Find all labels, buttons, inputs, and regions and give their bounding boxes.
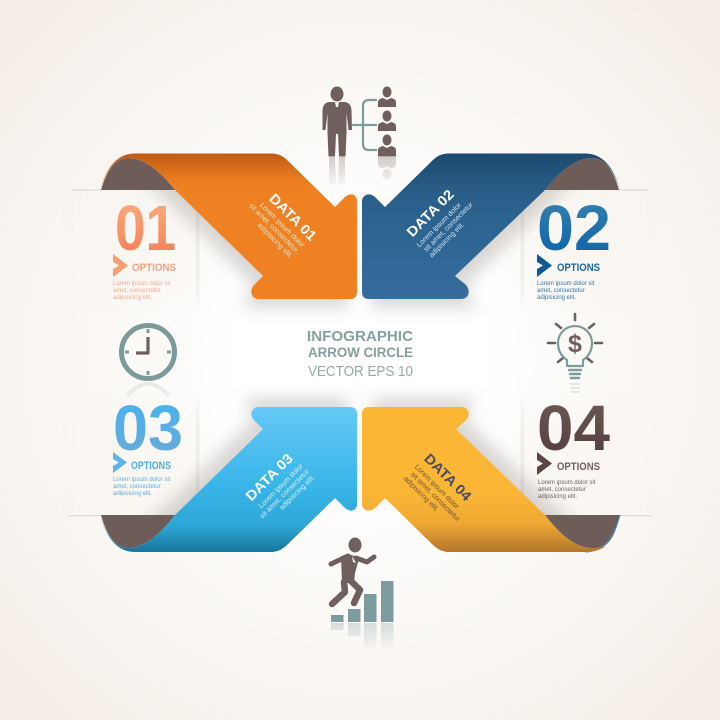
body text 01: Lorem ipsum dolor sit: [113, 281, 171, 287]
person: team member 1: [378, 86, 396, 107]
running person: [331, 538, 374, 604]
label DATA 03: DATA 03: [242, 450, 296, 504]
label DATA 04: [401, 450, 481, 529]
body text 04: adipisicing elit.: [538, 494, 577, 500]
icon: chevron 04: [537, 452, 552, 475]
label DATA 03: [239, 448, 317, 526]
label DATA 01: [242, 184, 320, 262]
body text 03: Lorem ipsum dolor sit: [113, 477, 171, 483]
heading: center title: ARROW CIRCLE: [308, 345, 413, 360]
icon: light bulb with dollar: [548, 314, 602, 392]
number 04: 04: [537, 392, 610, 464]
arrow: yellow DATA 04: [362, 398, 620, 552]
heading: center title: VECTOR EPS 10: [308, 363, 413, 380]
label DATA 03: adipisicing elit.: [277, 472, 317, 512]
label DATA 01: adipisicing elit.: [256, 221, 295, 260]
options label 02: OPTIONS: [557, 262, 600, 274]
icon: chevron 03: [113, 452, 127, 473]
label DATA 02: adipisicing elit.: [427, 220, 466, 259]
bar chart steps: [331, 581, 394, 622]
body text 02: amet, consectetur: [537, 288, 585, 294]
body text 02: Lorem ipsum dolor sit: [537, 281, 595, 287]
panel: option 04: [520, 405, 652, 516]
icon: clock: [122, 326, 174, 378]
icon: chevron 02: [537, 254, 552, 277]
heading: center title: [307, 328, 413, 380]
label DATA 04: sit amet, consectetur: [409, 470, 463, 524]
person: team member 2: [378, 110, 396, 131]
body text 04: amet, consectetur: [538, 487, 586, 493]
label DATA 01: DATA 01: [266, 190, 320, 244]
arrow: orange DATA 01: [100, 154, 357, 308]
reflection: manager and team: [329, 157, 396, 184]
label DATA 04: adipisicing elit.: [402, 474, 441, 513]
options label 01: OPTIONS: [132, 262, 176, 274]
dollar sign: $: [568, 330, 582, 358]
panel: option 01: [72, 190, 200, 300]
label DATA 02: [402, 181, 481, 260]
panel: option 02: [520, 190, 648, 300]
label DATA 01: Lorem ipsum dolor: [258, 201, 307, 249]
bars reflection: [331, 623, 394, 645]
arrow: blue DATA 02: [362, 154, 620, 308]
person: manager: [322, 86, 352, 156]
label DATA 01: sit amet, consectetur: [247, 201, 301, 255]
body text 03: adipisicing elit.: [113, 491, 152, 497]
body text 02: adipisicing elit.: [537, 295, 576, 301]
bulb reflection: [570, 384, 580, 392]
number 03: 03: [113, 392, 183, 464]
label DATA 04: Lorem ipsum dolor: [413, 462, 462, 511]
connector bracket: [353, 100, 376, 150]
icon: manager and team: [322, 86, 396, 184]
body text 03: amet, consectetur: [113, 484, 161, 490]
label DATA 03: Lorem ipsum dolor: [256, 461, 305, 510]
panel: option 03: [68, 405, 200, 516]
options label 04: OPTIONS: [557, 461, 600, 473]
icon: runner on bar chart: [331, 538, 394, 651]
label DATA 02: Lorem ipsum dolor: [415, 200, 463, 249]
options label 03: OPTIONS: [131, 460, 171, 472]
body text 01: adipisicing elit.: [113, 295, 152, 301]
person: team member 3: [378, 134, 396, 156]
label DATA 03: sit amet, consectetur: [258, 467, 311, 520]
arrow: cyan DATA 03: [100, 398, 357, 552]
label DATA 02: DATA 02: [403, 186, 457, 240]
icon: chevron 01: [113, 254, 128, 277]
heading: center title: INFOGRAPHIC: [307, 328, 413, 345]
label DATA 02: sit amet, consectetur: [421, 200, 475, 253]
clock reflection: [127, 384, 169, 396]
body text 01: amet, consectetur: [113, 288, 161, 294]
label DATA 04: DATA 04: [421, 450, 475, 504]
number 02: 02: [537, 192, 611, 264]
body text 04: Lorem ipsum dolor sit: [538, 480, 596, 486]
number 01: 01: [115, 192, 176, 264]
